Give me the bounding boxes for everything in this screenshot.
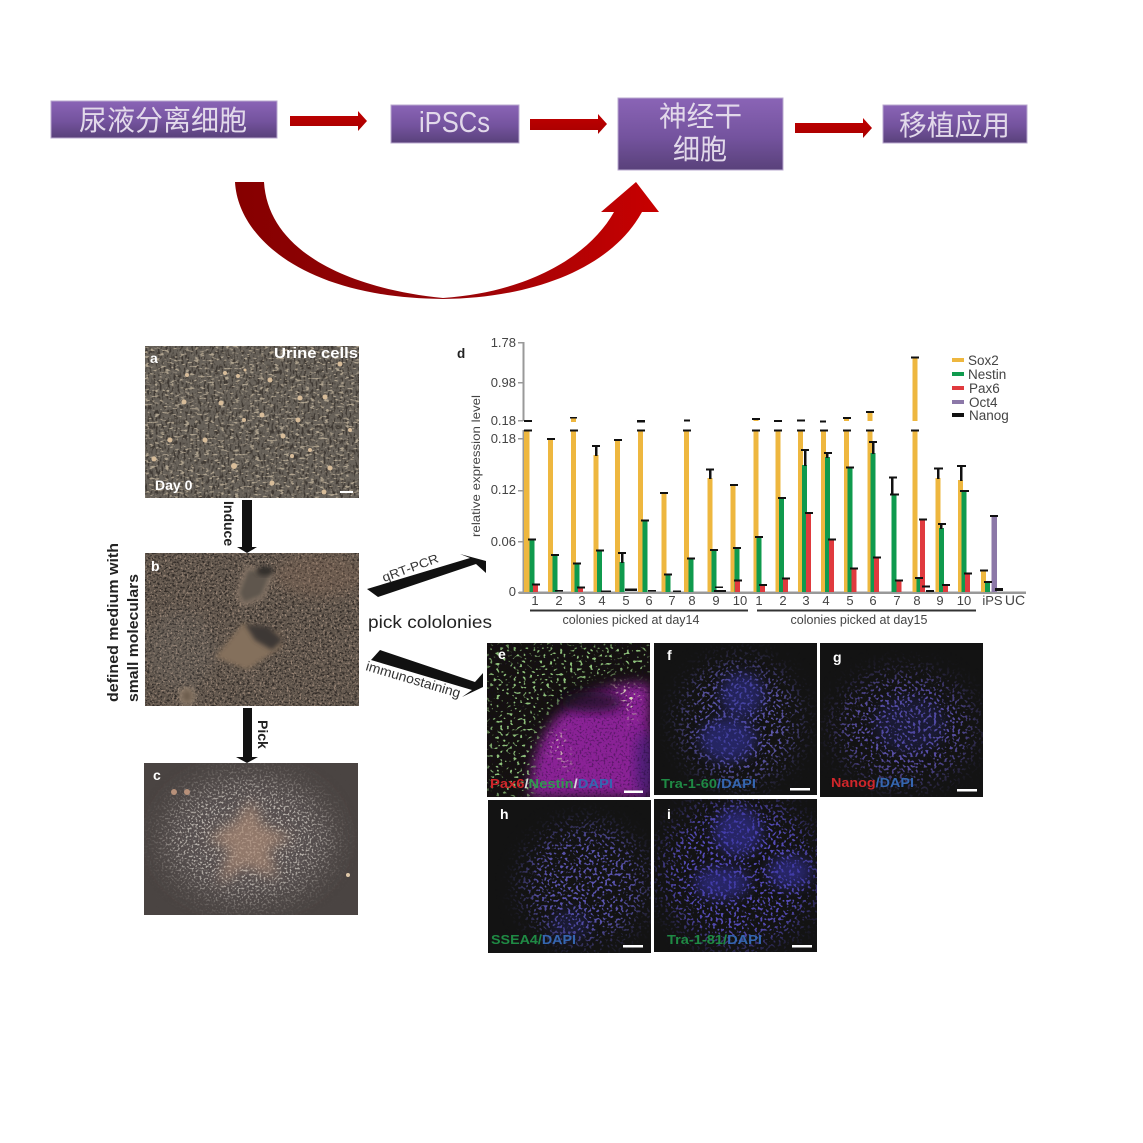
y axis title: relative expression level [469, 395, 483, 537]
x tick labels: 5 [622, 593, 630, 608]
x tick labels: iPS [982, 593, 1003, 608]
micrograph h: SSEA4 / DAPI [488, 800, 651, 953]
micrograph c: picked colony [144, 763, 358, 915]
box: neural stem cells: 神经干 [659, 101, 742, 132]
label: staining markers: SSEA4/ DAPI [491, 933, 576, 947]
label: staining markers: Nanog /DAPI [831, 776, 914, 790]
y axis tick labels: 0.98 [491, 375, 516, 390]
curved arrow: direct conversion [235, 182, 659, 299]
micrograph a: urine cells [145, 345, 359, 498]
x tick labels: 9 [936, 593, 944, 608]
label: staining markers: Tra-1-60 /DAPI [661, 777, 756, 791]
x tick labels: 10 [957, 593, 971, 608]
x tick labels: 5 [846, 593, 854, 608]
arrow: iPSCs to neural stem cells [530, 114, 607, 134]
micrograph i: Tra-1-81 / DAPI [654, 796, 820, 952]
arrow: induce [221, 500, 257, 553]
label: induce: Induce [221, 501, 237, 546]
legend: Oct4 [969, 395, 998, 410]
micrograph e: Pax6 / Nestin / DAPI [487, 643, 655, 799]
label: staining markers: Tra-1-81/ DAPI [667, 933, 762, 947]
x tick labels: 3 [802, 593, 810, 608]
x tick labels: 7 [668, 593, 676, 608]
error bars [524, 356, 1003, 592]
box: urine-derived cells: 尿液分离细胞 [79, 105, 247, 136]
label: staining markers: Pax6 /Nestin /DAPI [490, 777, 613, 791]
legend [952, 353, 1009, 423]
label: panel b: b [151, 558, 160, 574]
scale bar [340, 491, 353, 493]
side label: defined medium: defined medium with [106, 543, 122, 702]
label: panel a: a [150, 350, 158, 366]
arrow: qRT-PCR [367, 551, 486, 597]
group: colonies day 15: colonies picked at day15 [791, 613, 927, 627]
y axis tick labels: 0.12 [491, 482, 516, 497]
x tick labels: 1 [755, 593, 763, 608]
label: panel e: e [498, 646, 506, 662]
micrograph g: Nanog / DAPI [820, 643, 983, 797]
bar chart: relative expression level [457, 335, 1026, 627]
label: panel h: h [500, 806, 509, 822]
y axis tick labels: 0.18 [491, 431, 516, 446]
label: panel f: f [667, 647, 672, 663]
y axis tick labels: 1.78 [491, 335, 516, 350]
x tick labels: 4 [598, 593, 606, 608]
x tick labels: 2 [555, 593, 563, 608]
box: iPSCs [391, 105, 519, 143]
label: panel g: g [833, 649, 842, 665]
box: neural stem cells [618, 98, 783, 170]
scale bar [623, 945, 643, 948]
flow diagram [51, 98, 1027, 299]
arrow: immunostaining [364, 650, 483, 701]
micrograph f: Tra-1-60 / DAPI [654, 643, 817, 795]
arrow: neural stem cells to transplant [795, 118, 872, 138]
y axis tick labels: 0.18 [491, 413, 516, 428]
x tick labels: 9 [712, 593, 720, 608]
label: pick colonies: pick cololonies [368, 612, 492, 632]
box: urine-derived cells [51, 101, 277, 138]
side label: defined medium [106, 543, 142, 702]
x tick labels: 8 [688, 593, 696, 608]
x tick labels: UC [1005, 592, 1025, 608]
box: transplant application [883, 105, 1027, 143]
legend: Nestin [968, 367, 1006, 382]
x tick labels: 7 [893, 593, 901, 608]
box: neural stem cells: 细胞 [673, 134, 727, 165]
Sox2 bars [524, 357, 986, 592]
legend: Pax6 [969, 381, 1000, 396]
label: immunostaining: immunostaining [364, 658, 462, 701]
y axis tick labels [491, 335, 516, 599]
panel label d: d [457, 346, 465, 361]
box: transplant application: 移植应用 [899, 110, 1010, 141]
arrow: cells to iPSCs [290, 111, 367, 131]
Pax6 bars [533, 513, 970, 592]
scale bar [790, 788, 810, 790]
scale bar [624, 790, 643, 793]
box: iPSCs: iPSCs [419, 107, 490, 139]
label: pick: Pick [255, 720, 271, 749]
x tick labels: 6 [645, 593, 653, 608]
axes [518, 342, 1026, 594]
Nestin bars [530, 453, 990, 592]
label: panel i: i [667, 806, 671, 822]
label: qRT-PCR: qRT-PCR [380, 551, 440, 585]
arrow: pick [236, 708, 271, 763]
x tick labels: 10 [733, 593, 747, 608]
y axis tick labels: 0.06 [491, 534, 516, 549]
side label: defined medium: small moleculars [126, 574, 142, 702]
x tick labels: 1 [531, 593, 539, 608]
legend: Nanog [969, 408, 1009, 423]
x tick labels [531, 592, 1025, 608]
scale bar [957, 789, 977, 792]
x tick labels: 8 [913, 593, 921, 608]
x tick labels: 6 [869, 593, 877, 608]
label: panel c: c [153, 767, 161, 783]
scale bar [792, 945, 812, 948]
x tick labels: 2 [779, 593, 787, 608]
micrograph b: induced colonies [145, 553, 365, 706]
legend: Sox2 [968, 353, 999, 368]
x tick labels: 3 [578, 593, 586, 608]
x tick labels: 4 [822, 593, 830, 608]
label: urine cells: Urine cells [274, 345, 358, 362]
label: day 0: Day 0 [155, 477, 193, 493]
Oct4 bar [992, 516, 997, 592]
group: colonies day 14: colonies picked at day14 [563, 613, 699, 627]
y axis tick labels: 0 [509, 584, 516, 599]
